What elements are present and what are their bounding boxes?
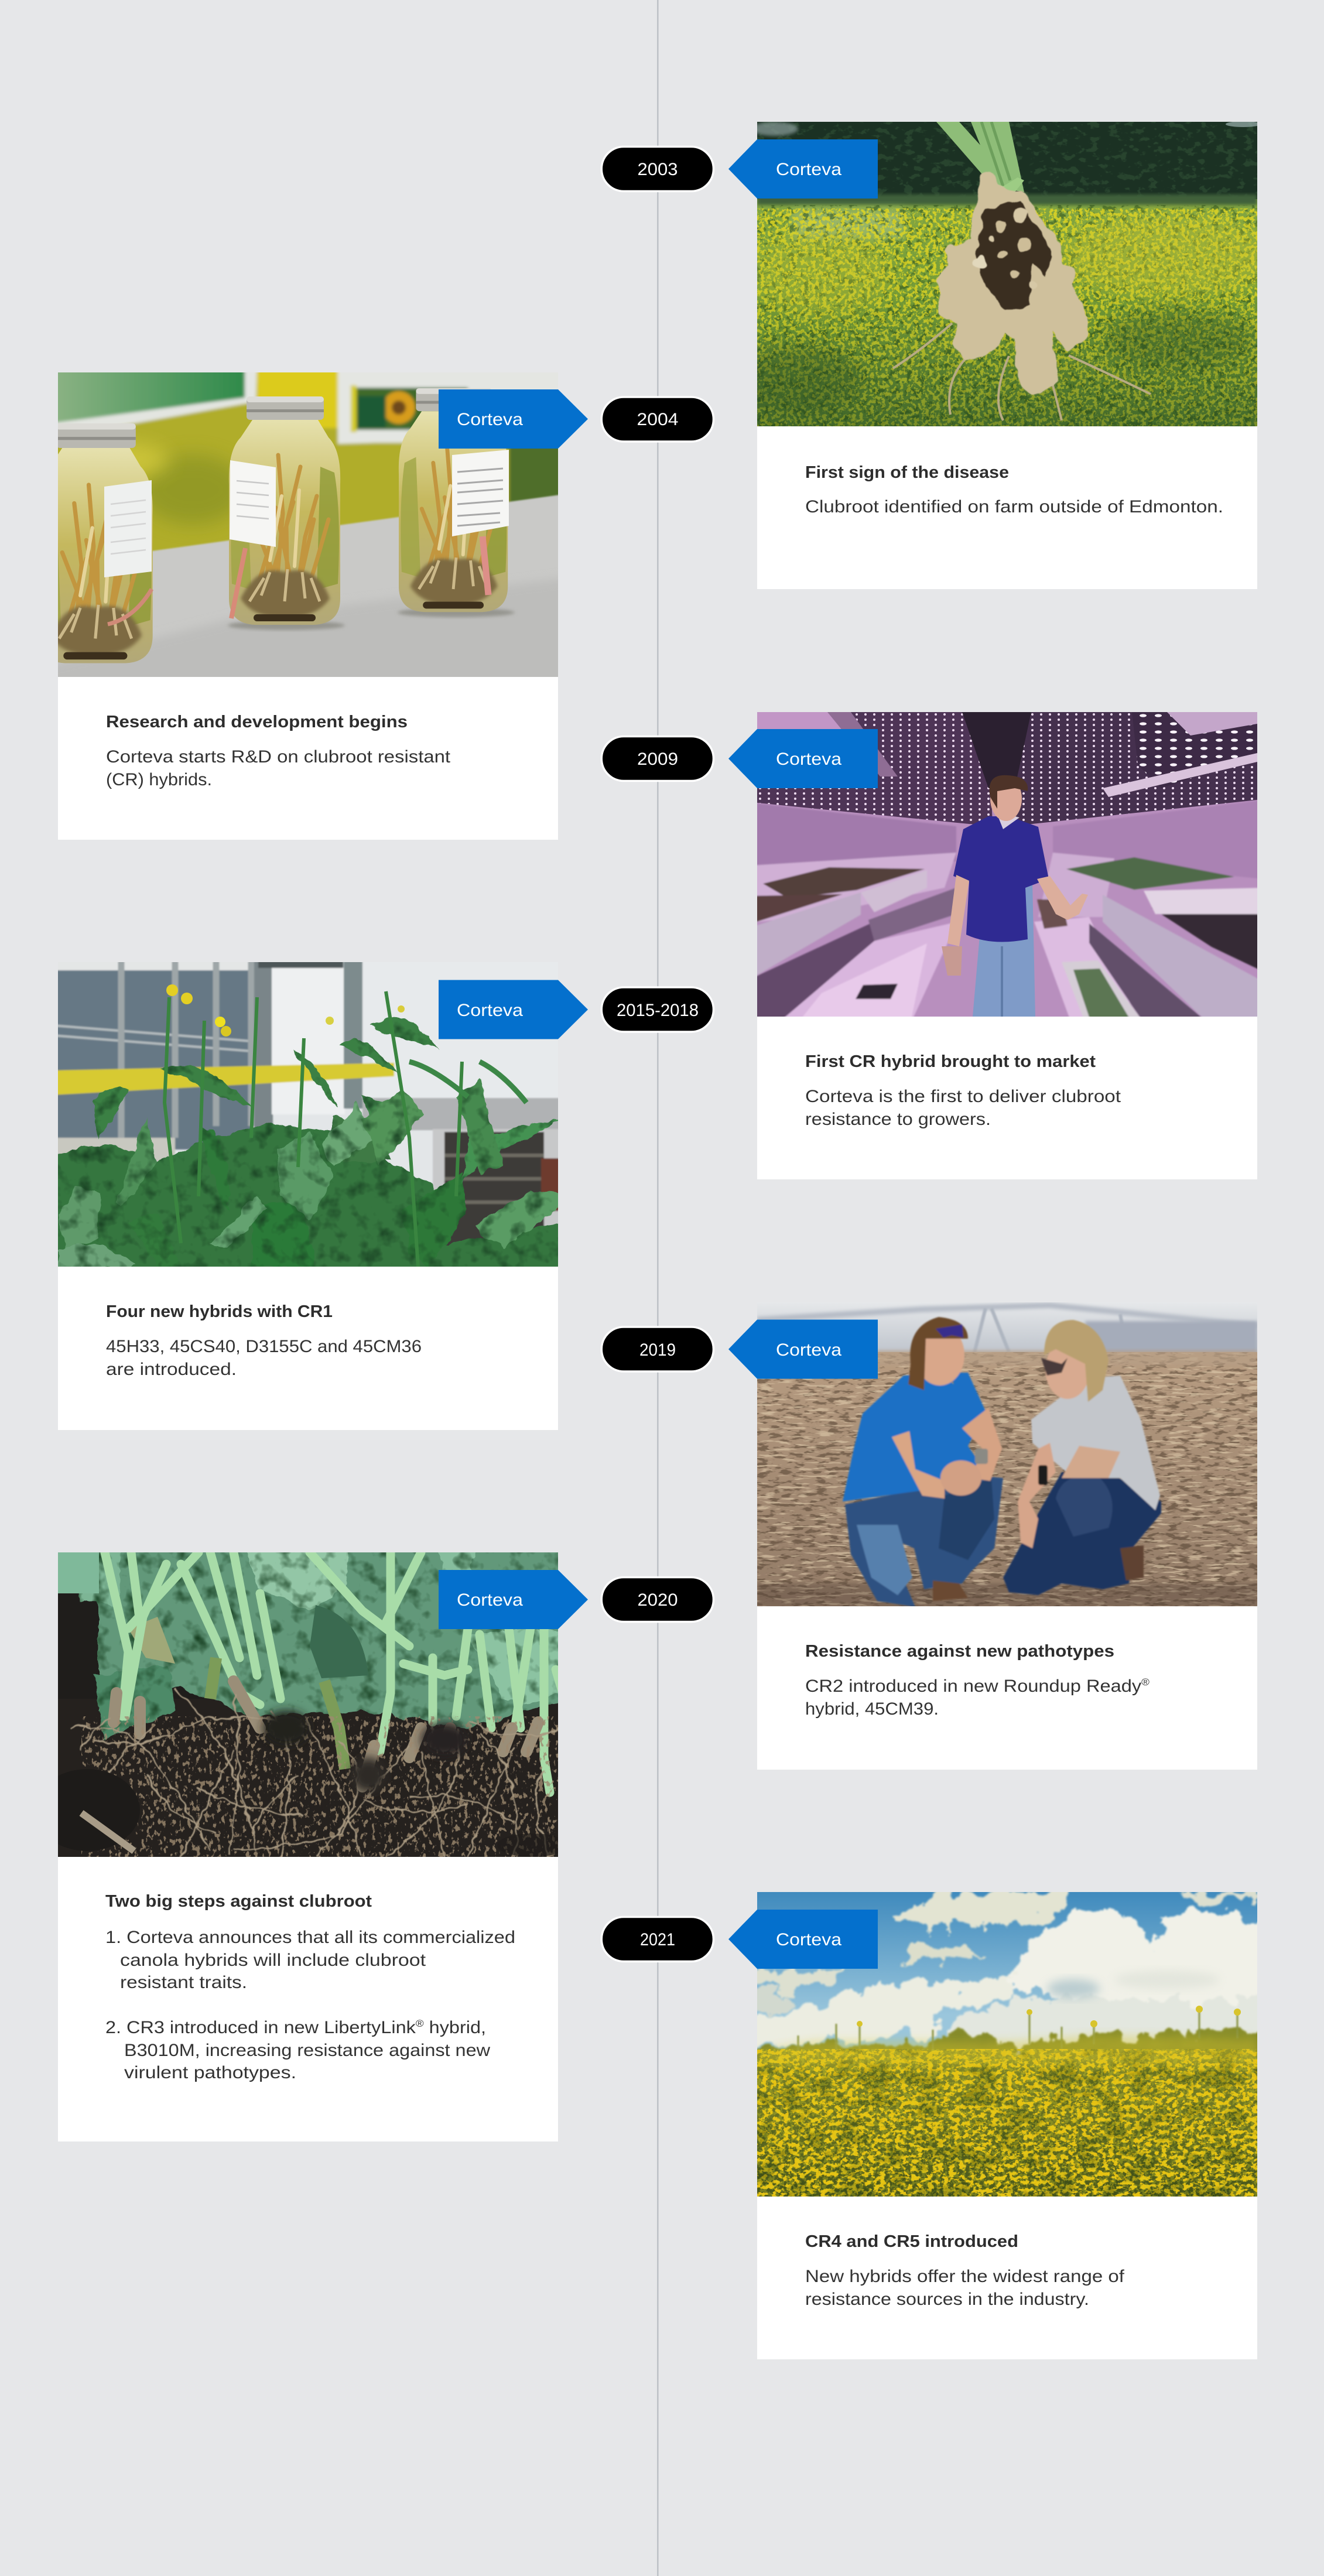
tag: Corteva: Corteva: [457, 1590, 523, 1610]
photo: canola roots on dark soil: [35, 1535, 576, 1857]
year pill: 2021: [601, 1917, 713, 1962]
heading: First CR hybrid brought to market: [805, 1052, 1096, 1071]
text panel: [757, 2197, 1257, 2359]
body text: 45H33, 45CS40, D3155C and 45CM36: [106, 1337, 422, 1356]
photo: jars of roots: [58, 372, 558, 677]
panel: 2004 research and development: [38, 361, 588, 840]
heading: Four new hybrids with CR1: [106, 1302, 333, 1321]
body text: Corteva is the first to deliver clubroot: [805, 1087, 1121, 1106]
man: drawn shapes: [973, 882, 1035, 1017]
panel: 2020 two big steps: [35, 1535, 588, 2141]
body text: New hybrids offer the widest range of: [805, 2267, 1125, 2286]
body text: ®: [1141, 1677, 1150, 1688]
text panel: [58, 1857, 558, 2141]
body text line 2: resistance to growers.: [805, 1110, 991, 1129]
panel: 2009 first CR hybrid: [728, 712, 1263, 1179]
tag: Corteva: [728, 729, 878, 788]
year pill: 2019: 2019: [639, 1340, 676, 1360]
text panel: [757, 1606, 1257, 1770]
year pill: 2009: 2009: [637, 750, 678, 769]
body text: step 1: 1. Corteva announces that all its commercialized: [105, 1928, 515, 1947]
body text: Corteva starts R&D on clubroot resistant: [106, 747, 450, 767]
panel: 2015-2018 four new hybrids: [40, 956, 588, 1430]
tag: Corteva: Corteva: [776, 1340, 841, 1360]
photo: canola field under cloudy sky: [740, 1892, 1275, 2226]
tag: Corteva: Corteva: [776, 1930, 841, 1949]
tag: Corteva: [439, 389, 588, 449]
heading: Two big steps against clubroot: [105, 1892, 372, 1911]
woman 2: [1003, 1320, 1161, 1595]
tag: Corteva: [439, 980, 588, 1039]
tag: Corteva: [728, 1320, 878, 1378]
year pill: 2015-2018: [601, 987, 713, 1032]
tag: Corteva: [728, 139, 878, 199]
year pill: 2003: [601, 146, 713, 191]
body text: step 2: [105, 2018, 491, 2082]
body text: step 1: canola hybrids will include clubroot: [120, 1951, 426, 1970]
heading: Resistance against new pathotypes: [805, 1642, 1114, 1661]
tag: Corteva: [728, 1910, 878, 1969]
tag: Corteva: Corteva: [776, 750, 841, 769]
heading: CR4 and CR5 introduced: [805, 2232, 1018, 2251]
text panel: [757, 1017, 1257, 1179]
body text: Clubroot identified on farm outside of Edmonton.: [805, 497, 1223, 516]
panel: 2019 resistance against new pathotypes: [728, 1302, 1257, 1770]
heading: Research and development begins: [106, 713, 408, 731]
text panel: [58, 677, 558, 840]
tag: Corteva: Corteva: [776, 160, 841, 179]
body text: step 1: [105, 1928, 515, 1992]
plant mass: [58, 1017, 558, 1267]
photo: canola plants in greenhouse: [58, 962, 558, 1267]
photo: man in purple-lit grow room: [751, 712, 1263, 1022]
heading: First sign of the disease: [805, 463, 1009, 482]
tag: Corteva: [439, 1570, 588, 1629]
year pill: 2004: [601, 397, 713, 442]
body text: step 2: hybrid,: [424, 2018, 486, 2037]
year pill: 2009: [601, 737, 713, 781]
body text line 2: hybrid, 45CM39.: [805, 1699, 939, 1719]
body text line 2: resistance sources in the industry.: [805, 2290, 1089, 2309]
year pill: 2020: [601, 1578, 713, 1622]
body text: step 2: virulent pathotypes.: [124, 2063, 296, 2082]
tag: Corteva: Corteva: [457, 410, 523, 429]
body text: step 2: B3010M, increasing resistance against new: [124, 2041, 491, 2060]
year pill: 2003: 2003: [637, 160, 678, 179]
body text line 2: are introduced.: [106, 1360, 237, 1379]
body text line 2: (CR) hybrids.: [106, 770, 212, 789]
body text: step 2: 2. CR3 introduced in new LibertyLink: [105, 2018, 388, 2037]
panel: 2021 CR4 and CR5: [728, 1892, 1275, 2359]
body text: step 1: resistant traits.: [120, 1973, 247, 1992]
tag: Corteva: Corteva: [457, 1001, 523, 1020]
photo: clubroot root in canola field: [734, 121, 1272, 426]
body text: step 2: ®: [416, 2018, 424, 2029]
text panel: [757, 426, 1257, 589]
body text: CR2 introduced in new Roundup Ready: [805, 1677, 1110, 1696]
year pill: 2019: [601, 1327, 713, 1371]
photo: two women in stubble field: [757, 1302, 1257, 1607]
text panel: [58, 1267, 558, 1430]
year pill: 2015-2018: 2015-2018: [617, 1001, 699, 1020]
year pill: 2020: 2020: [637, 1590, 678, 1610]
panel: 2003 first sign of the disease: [728, 121, 1272, 589]
timeline line: [657, 0, 659, 2576]
year pill: 2004: 2004: [637, 410, 678, 429]
woman 1: [843, 1317, 1003, 1607]
year pill: 2021: 2021: [640, 1930, 675, 1949]
